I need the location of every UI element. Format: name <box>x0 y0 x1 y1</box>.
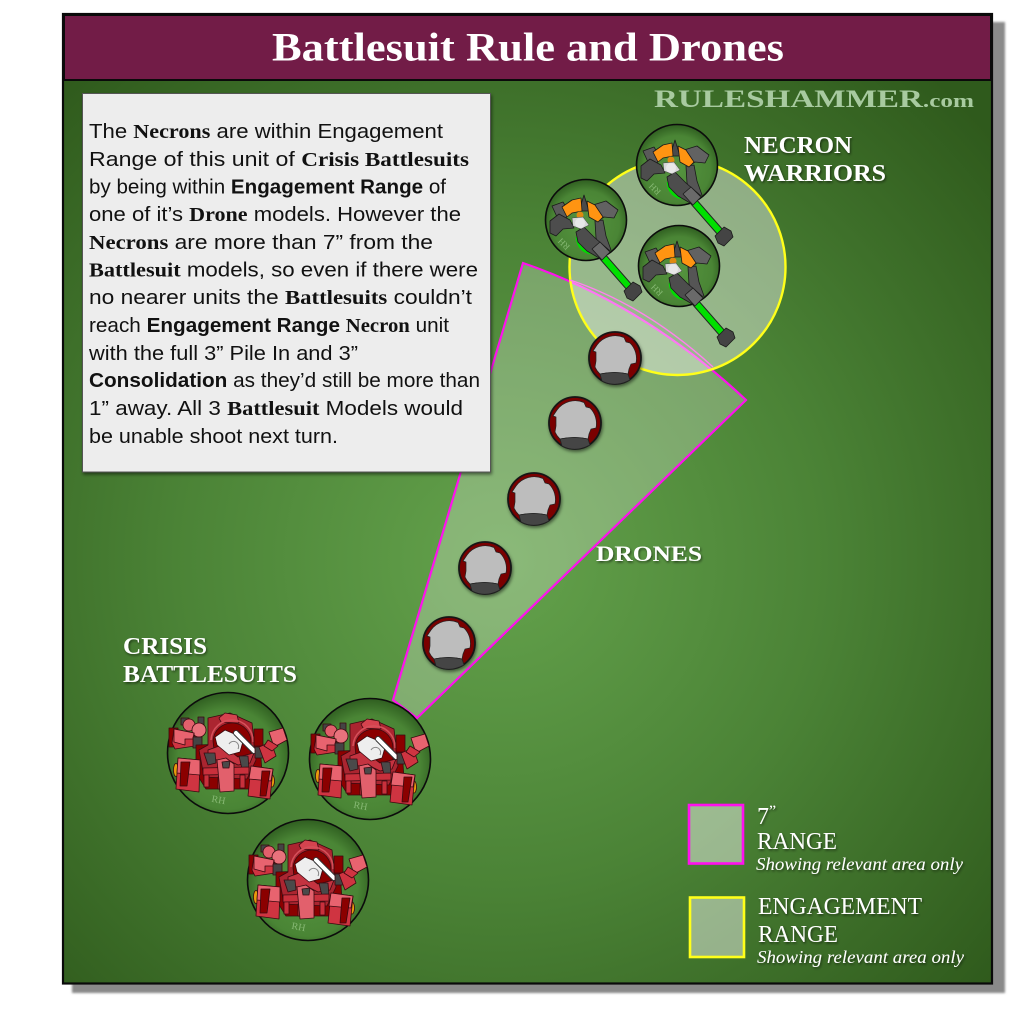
crisis battlesuits label: CRISIS <box>123 634 207 660</box>
crisis battlesuit bottom: RH <box>291 921 306 934</box>
necron warrior right <box>638 226 735 347</box>
wedge edge over circle <box>570 280 713 367</box>
explanation text box: Consolidation as they’d still be more than <box>89 369 480 392</box>
explanation text box: with the full 3” Pile In and 3” <box>88 342 358 365</box>
legend: engagement range <box>690 894 964 967</box>
necron warrior left: RH <box>556 236 572 252</box>
legend text engagement: ENGAGEMENT <box>758 894 922 920</box>
explanation text box: 1” away. All 3 Battlesuit Models would <box>89 397 463 420</box>
legend swatch magenta <box>689 805 743 864</box>
necron warrior top: RH <box>647 181 663 197</box>
legend swatch yellow <box>690 898 744 957</box>
necron warriors label: NECRON <box>744 133 853 159</box>
explanation text box: Necrons are more than 7” from the <box>89 231 433 254</box>
legend text range: Showing relevant area only <box>756 854 963 874</box>
crisis battlesuit left: RH <box>211 794 226 807</box>
legend text range: RANGE <box>757 829 837 855</box>
explanation text box: by being within Engagement Range of <box>89 176 446 198</box>
explanation text box: one of it’s Drone models. However the <box>89 203 461 226</box>
crisis battlesuit right: RH <box>353 800 368 813</box>
watermark: RULESHAMMER .com <box>654 86 974 113</box>
explanation text box: be unable shoot next turn. <box>89 425 338 448</box>
legend text engagement <box>757 894 964 967</box>
title banner <box>64 15 991 80</box>
necron warrior left <box>546 180 642 301</box>
explanation text box: Range of this unit of Crisis Battlesuits <box>89 148 469 171</box>
drones label: DRONES <box>596 541 702 566</box>
explanation text box: Battlesuit models, so even if there were <box>89 258 478 282</box>
crisis battlesuit models <box>168 692 430 940</box>
necron warriors label: WARRIORS <box>744 161 886 187</box>
explanation text box: reach Engagement Range Necron unit <box>89 314 449 337</box>
necron warrior models <box>546 124 735 347</box>
crisis battlesuits label <box>123 634 297 688</box>
legend: 7 inch range <box>689 803 963 874</box>
legend text engagement: RANGE <box>758 922 838 948</box>
legend text range <box>756 803 963 874</box>
engagement range circle <box>570 159 786 375</box>
necron warrior right: RH <box>649 282 665 298</box>
7 inch range wedge <box>393 263 746 718</box>
explanation text box <box>82 94 490 472</box>
legend text range: ” <box>769 803 776 820</box>
explanation text box: no nearer units the Battlesuits couldn’t <box>89 286 472 309</box>
necron warriors label <box>744 133 886 187</box>
legend text engagement: Showing relevant area only <box>757 947 964 967</box>
explanation text: The Necrons are within Engagement <box>89 120 443 143</box>
title: Battlesuit Rule and Drones <box>272 24 784 70</box>
drone models <box>423 332 641 669</box>
necron warrior top <box>636 124 733 246</box>
legend text range: 7 <box>757 804 769 830</box>
crisis battlesuits label: BATTLESUITS <box>123 662 297 688</box>
crisis battlesuit left <box>168 692 288 814</box>
crisis battlesuit right <box>310 698 430 820</box>
crisis battlesuit bottom <box>248 820 368 940</box>
